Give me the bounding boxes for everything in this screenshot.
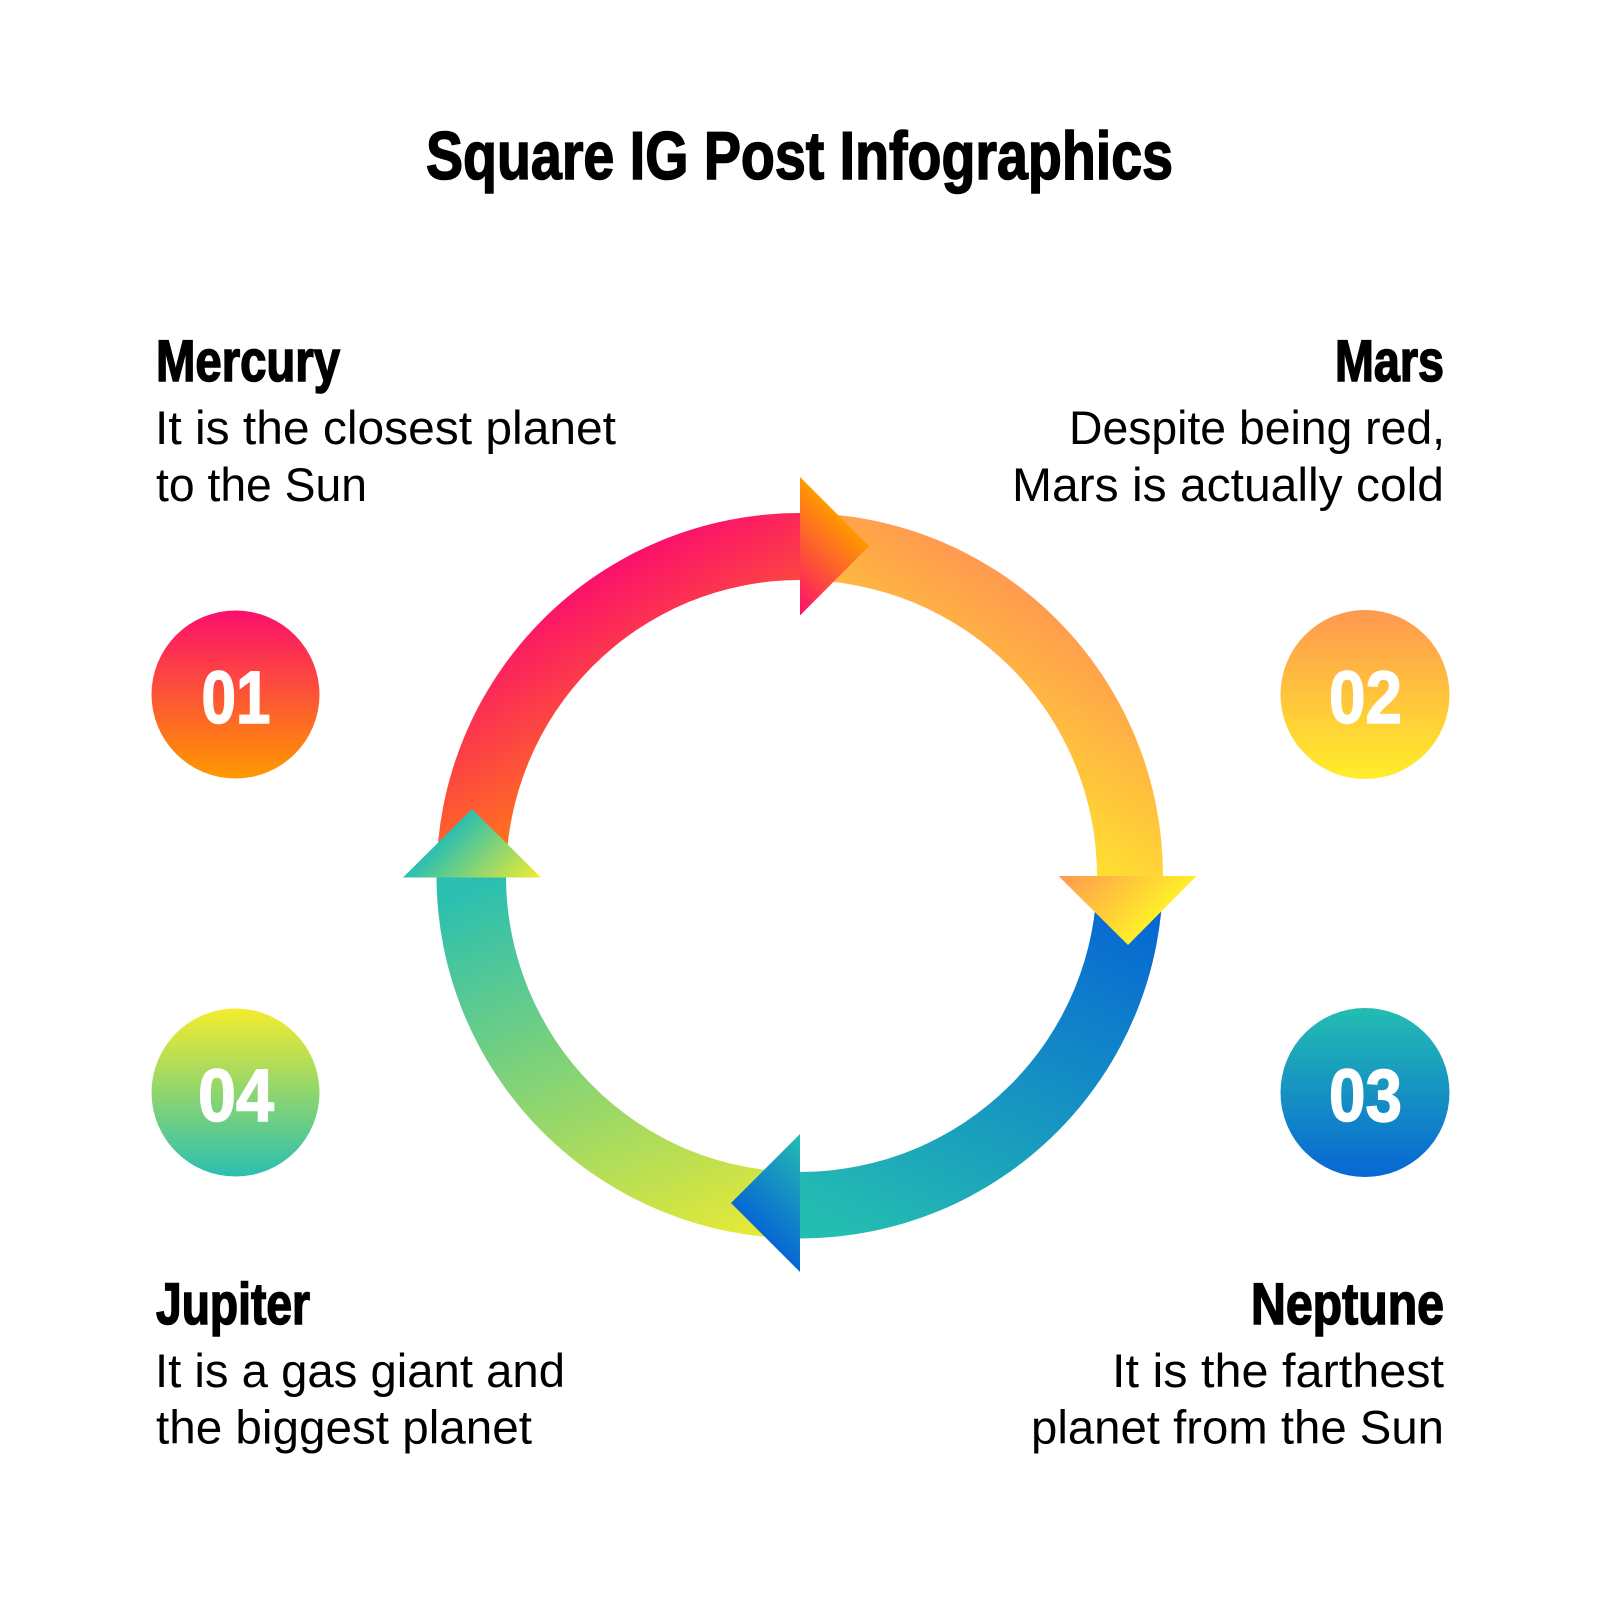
arrow: bottom, pointing left: [731, 1134, 800, 1272]
badge: 02: 02: [1329, 656, 1402, 739]
description: Neptune: planet from the Sun: [1031, 1400, 1444, 1454]
arrow: top, pointing right: [800, 477, 869, 616]
text block: Mars: [1012, 329, 1445, 511]
description: Mars: Mars is actually cold: [1012, 458, 1444, 511]
description: Mars: Despite being red,: [1069, 401, 1445, 454]
arc: Neptune segment: [800, 876, 1163, 1238]
badge: 02: [1280, 610, 1450, 779]
arc: Mars segment: [800, 513, 1163, 876]
arrow: left, pointing up: [403, 809, 541, 878]
heading: Neptune: Neptune: [1251, 1272, 1444, 1337]
badge: 01: [152, 610, 320, 778]
arrow: right, pointing down: [1058, 876, 1196, 945]
description: Neptune: It is the farthest: [1112, 1344, 1444, 1397]
badge: 03: [1280, 1008, 1450, 1177]
heading: Jupiter: Jupiter: [156, 1272, 310, 1337]
text block: Neptune: [1031, 1272, 1444, 1454]
text block: Mercury: [155, 329, 616, 511]
badge: 04: 04: [198, 1054, 274, 1137]
badge: 01: 01: [202, 656, 270, 739]
description: Mercury: It is the closest planet: [155, 401, 616, 454]
circular cycle diagram: [403, 477, 1196, 1272]
description: Jupiter: [155, 1344, 565, 1454]
description: Neptune: [1031, 1344, 1444, 1454]
heading: Mars: Mars: [1335, 329, 1444, 394]
text block: Jupiter: [155, 1272, 565, 1454]
heading: Mercury: Mercury: [156, 329, 340, 394]
description: Mercury: [155, 401, 616, 511]
title: Square IG Post Infographics: [426, 118, 1173, 194]
description: Jupiter: the biggest planet: [156, 1400, 532, 1454]
arc: Mercury segment: [436, 513, 800, 876]
arc: Jupiter segment: [436, 876, 800, 1238]
badge: 03: 03: [1329, 1054, 1402, 1137]
description: Mercury: to the Sun: [156, 458, 367, 511]
badge: 04: [152, 1008, 320, 1176]
description: Mars: [1012, 401, 1445, 511]
description: Jupiter: It is a gas giant and: [155, 1344, 565, 1397]
